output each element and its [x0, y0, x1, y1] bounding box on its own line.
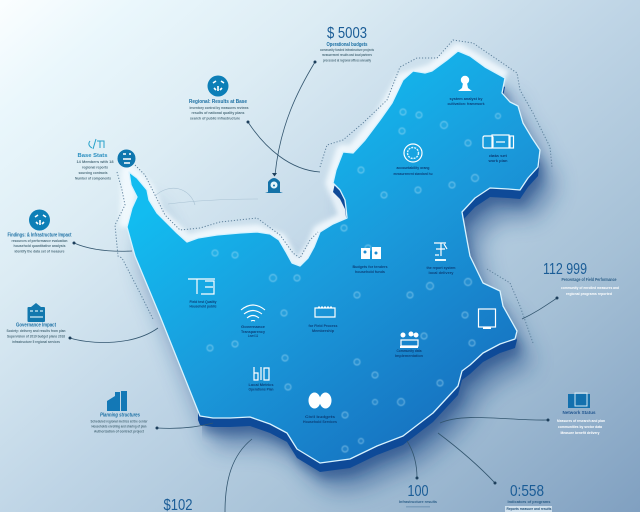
map surface: [127, 51, 540, 463]
label: wifi: Level 11: [248, 334, 258, 338]
icon: people: [400, 332, 418, 348]
callout: left circle: household quantitative analysis: [14, 244, 66, 248]
callout: left building: Governance Impact: [16, 322, 56, 328]
callout: right books: Measures of research and plan: [557, 419, 606, 423]
callout: bottom left towers: Authorization of contract project: [94, 430, 145, 434]
label: tools: Household public: [190, 304, 216, 308]
leader lines: [68, 60, 558, 512]
label: wifi: Transparency: [241, 330, 265, 334]
callout: bottom center number: 100: [408, 483, 429, 500]
callout: top left circle: [189, 76, 248, 120]
callout: top number: $ 5003: [327, 25, 367, 42]
callout: bottom center number: Infrastructure results: [399, 500, 437, 504]
callout: peninsula label: [75, 139, 114, 180]
label: devices: data set: [489, 154, 508, 158]
callout: left circle: [8, 210, 72, 254]
dotted coast lines: [115, 40, 552, 343]
label: two blobs: Household Services: [303, 420, 337, 424]
callout: left building: Society: delivery and results from plan: [6, 329, 66, 333]
label: table: Budgets for tenders: [352, 265, 388, 269]
label: person: system analyst by: [450, 97, 482, 101]
icon: wifi: [241, 305, 265, 321]
label: bars: Local Metrics: [248, 383, 274, 387]
label: table: [352, 265, 388, 274]
callout: top left circle: results of national quality plans: [192, 111, 244, 115]
callout: bottom left towers: Scheduled regional metrics at the center: [90, 420, 148, 424]
label: person: cultivation: framework: [448, 102, 484, 106]
callout: right books: Network Status: [562, 410, 596, 415]
label: wifi: Governance: [241, 325, 265, 329]
callout: bottom right number: 0:558: [510, 483, 544, 500]
callout: top left circle: inventory control by measures reviews: [190, 106, 248, 110]
callout: right number: 112 999: [543, 261, 587, 278]
callout: top left circle: Regional: Results at Base: [189, 99, 247, 105]
label: person: [448, 97, 484, 106]
callout: peninsula label: 14 Members with 18: [76, 160, 114, 164]
icon: person: [458, 76, 472, 91]
callout: left building: [6, 303, 66, 344]
label: tag box: Membership: [312, 329, 335, 333]
label: tag box: [308, 324, 338, 333]
callout: bottom left towers: Planning structures: [100, 412, 140, 418]
label: wifi: [241, 325, 265, 338]
icon: tablet: [478, 309, 496, 328]
callout: right books: communities by sector data: [558, 425, 603, 429]
callout: left circle: Findings: & Infrastructure Impact: [8, 232, 72, 238]
callout: bottom right number: [505, 483, 552, 512]
callout: top number: processed at regional offices annually: [323, 58, 372, 62]
callout: left building: infrastructure 5 regional services: [12, 340, 60, 344]
map decorative icons: [207, 109, 500, 452]
label: people: Community data: [396, 349, 422, 353]
callout: bottom center number: [399, 483, 437, 508]
icon: two blobs: [308, 392, 332, 408]
callout: peninsula label: Base Stats: [78, 153, 108, 159]
label: tools: Field test Quality: [190, 300, 216, 304]
callout: top left circle: search of public infrastructure: [190, 116, 240, 120]
label: target: measurement standard hu: [394, 172, 432, 176]
map shadow: [131, 67, 554, 491]
icon: bars: [254, 367, 269, 380]
callout: peninsula label: regional reports: [82, 166, 108, 170]
icon: devices: [483, 135, 514, 148]
callout: top number: measurement results and local partners: [322, 53, 372, 57]
callout: bottom left towers: [90, 391, 148, 434]
label: devices: work plan: [487, 159, 508, 163]
icon: table: [361, 247, 381, 259]
callout: left building: Supervision of 2019 budget plans 2018: [7, 334, 65, 338]
robot marker icon: [265, 178, 283, 193]
label: target: [394, 166, 432, 176]
label: bars: Operations Plan: [248, 388, 274, 392]
label: devices: [487, 154, 508, 163]
callout: right books: Measure benefit delivery: [560, 431, 600, 435]
callout: right number: Percentage of Field Performance: [562, 277, 617, 282]
label: target: accountability orang: [396, 166, 430, 170]
callout: top number: [320, 25, 374, 62]
icon: target: [404, 144, 422, 162]
callout: peninsula label: sourcing contracts: [78, 171, 108, 175]
map halo: [127, 51, 505, 266]
label: bars: [248, 383, 274, 392]
callout: bottom right number: Reports measure and results: [506, 507, 552, 511]
callout: bottom right number: Indicators of programs: [508, 500, 550, 504]
label: two blobs: Civil budgets: [305, 415, 335, 419]
callout: top number: community funded infrastructure projects: [320, 48, 374, 52]
callout: right number: regional programs reported: [566, 292, 613, 296]
label: signpost: local delivery: [428, 271, 454, 275]
icon: peninsula circle: [118, 150, 136, 168]
callout: peninsula label: Number of components: [75, 176, 111, 180]
icon: tag box: [315, 307, 335, 317]
callout: bottom left towers: Households enrolling and sharing of plan: [92, 424, 147, 428]
map extrusion: [198, 86, 540, 472]
callout: right number: community of enrolled measures and: [561, 286, 620, 290]
callout: right books: [557, 393, 606, 435]
icon: tools: [188, 279, 215, 294]
label: signpost: the report system: [426, 266, 456, 270]
callout: right number: [543, 261, 620, 296]
label: table: household funds: [355, 270, 385, 274]
label: signpost: [426, 259, 456, 275]
icon: signpost: [434, 243, 447, 256]
label: people: Implementation: [395, 354, 423, 358]
label: people: [395, 349, 423, 358]
label: tag box: for Field Process: [308, 324, 338, 328]
label: tools: [190, 300, 216, 308]
label: two blobs: [303, 415, 337, 424]
callout: left circle: identify the data set of measure: [14, 250, 64, 254]
callout: top number: Operational budgets: [326, 42, 368, 48]
callout: left circle: resources of performance evaluation: [12, 239, 68, 243]
